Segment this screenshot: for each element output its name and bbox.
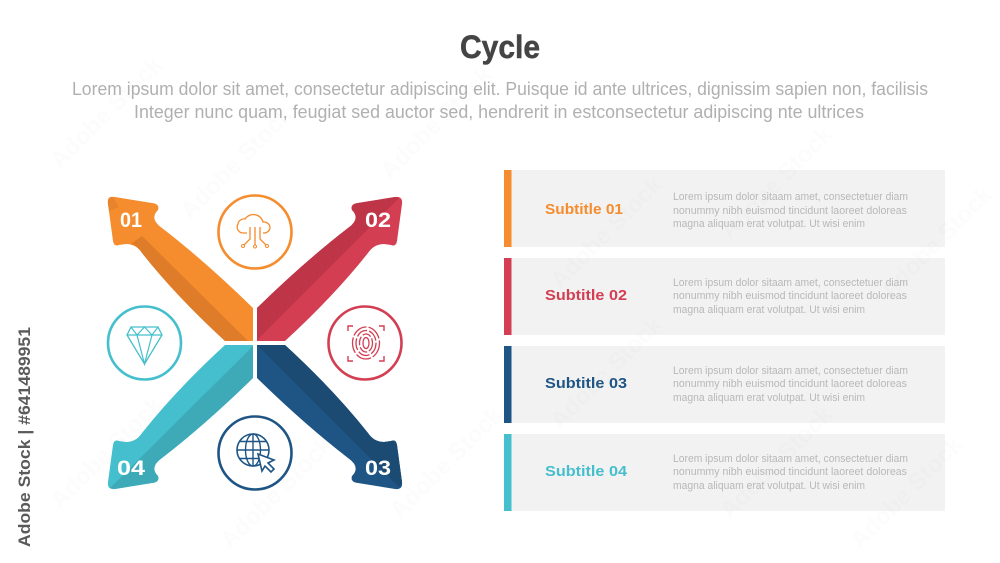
icon: cloud circle [218,196,292,268]
watermark: Adobe Stock [845,431,968,554]
panel: item 04: Subtitle 04 [545,463,628,480]
arrow 04 teal [108,345,253,489]
panel: item 03 [504,346,945,423]
arrow 02 red [257,197,402,341]
watermark: Adobe Stock [545,311,668,434]
watermark: Adobe Stock [385,401,508,524]
description text: Integer nunc quam, feugiat sed auctor sed, hendrerit in estconsectetur adipiscing nte ultrices [134,101,864,122]
number 03: 03 [365,457,391,480]
watermark: Adobe Stock [545,171,668,294]
panel: item 04: Lorem ipsum dolor sitaam amet, consectetuer diam [673,453,908,465]
panel: item 04: magna aliquam erat volutpat. Ut wisi enim [673,480,865,492]
watermark: Adobe Stock [715,121,838,244]
panel: item 03: nonummy nibh euismod tincidunt laoreet doloreas [673,378,907,390]
arrow 01 orange [108,197,253,341]
watermark: Adobe Stock [375,61,498,184]
panel: item 03: magna aliquam erat volutpat. Ut wisi enim [673,392,865,404]
number 04: 04 [117,457,145,480]
number 01: 01 [120,209,142,232]
panel: item 02: magna aliquam erat volutpat. Ut wisi enim [673,304,865,316]
watermark: Adobe Stock [45,51,168,174]
number 02: 02 [365,209,391,232]
description text [72,78,928,122]
panel: item 01: magna aliquam erat volutpat. Ut wisi enim [673,218,865,230]
panel: item 01: nonummy nibh euismod tincidunt laoreet doloreas [673,205,907,217]
side credit label: Adobe Stock | #641489951 [15,327,34,547]
title: Cycle [460,29,540,65]
watermark: Adobe Stock [175,101,298,224]
icon: globe circle [218,416,292,490]
watermark: Adobe Stock [45,391,168,514]
panel: item 01: Subtitle 01 [545,201,623,218]
panel: item 04: nonummy nibh euismod tincidunt laoreet doloreas [673,466,907,478]
panel: item 03: Lorem ipsum dolor sitaam amet, consectetuer diam [673,365,908,377]
panel: item 02 [504,258,945,335]
watermark: Adobe Stock [875,181,998,304]
panel: item 02: Lorem ipsum dolor sitaam amet, consectetuer diam [673,277,908,289]
panel: item 04 [504,434,945,511]
arrow 03 navy [257,345,402,489]
description text: Lorem ipsum dolor sit amet, consectetur adipiscing elit. Puisque id ante ultrices, dignissim sapien non, facilisis [72,78,928,99]
panel: item 01: Lorem ipsum dolor sitaam amet, consectetuer diam [673,191,908,203]
watermark: Adobe Stock [715,401,838,524]
watermark: Adobe Stock [215,431,338,554]
icon: fingerprint circle [328,306,402,380]
panel: item 02: nonummy nibh euismod tincidunt laoreet doloreas [673,290,907,302]
icon: diamond circle [108,306,181,380]
panel: item 03: Subtitle 03 [545,375,627,392]
panel: item 02: Subtitle 02 [545,287,627,304]
panel: item 01 [504,170,945,247]
